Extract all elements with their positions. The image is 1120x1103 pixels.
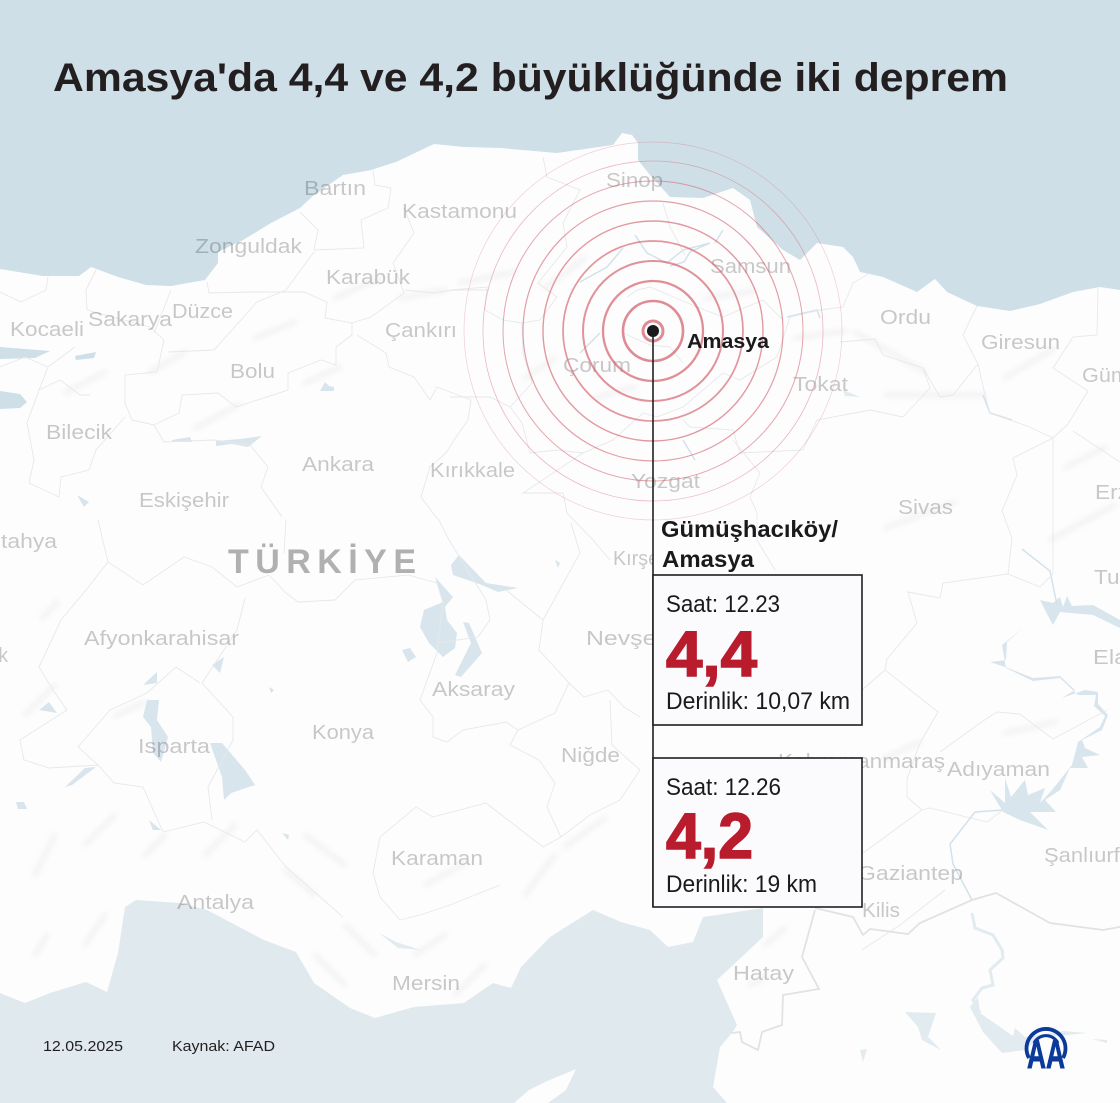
label: Kocaeli: Kocaeli (10, 319, 84, 341)
panel: second earthquake 12.26 (653, 758, 862, 907)
depth: Derinlik: 19 km (666, 871, 817, 898)
label: TÜRKİYE country name: TÜRKİYE (228, 543, 416, 581)
depth: Derinlik: 10,07 km (666, 688, 850, 715)
date: 12.05.2025 (43, 1038, 123, 1055)
epicentre seismic rings (464, 142, 842, 520)
label: Bartın: Bartın (304, 178, 366, 200)
label: Sakarya: Sakarya (88, 309, 173, 331)
label: Antalya: Antalya (177, 892, 255, 914)
label: Kırşehir: Kırşehir (613, 548, 681, 570)
lakes and dams (0, 347, 1120, 1062)
icon: Anadolu Agency logo: AA (1027, 1033, 1065, 1077)
label: Zonguldak: Zonguldak (195, 236, 303, 258)
label: Düzce: Düzce (172, 301, 233, 323)
label: Afyonkarahisar: Afyonkarahisar (84, 628, 239, 650)
label: Çorum: Çorum (563, 355, 631, 377)
Black Sea (0, 0, 1120, 311)
label: Mersin: Mersin (392, 973, 460, 995)
label: Eskişehir: Eskişehir (139, 490, 229, 512)
icon: Anadolu Agency logo (1026, 1029, 1066, 1077)
time: Saat: 12.23 (666, 591, 780, 618)
label: Isparta: Isparta (138, 736, 211, 758)
label: Niğde: Niğde (561, 745, 620, 767)
island: Cyprus (514, 1069, 576, 1103)
label: Çankırı: Çankırı (385, 320, 457, 342)
label: Yozgat: Yozgat (631, 471, 700, 493)
province borders (0, 157, 1120, 950)
location heading: Gümüşhacıköy/Amasya: Gümüşhacıköy/ (661, 516, 839, 542)
label: Samsun: Samsun (710, 256, 791, 278)
magnitude 4,2: 4,2 (666, 800, 753, 872)
label: Nevşehir: Nevşehir (586, 628, 684, 650)
epicentre dot (647, 325, 659, 337)
label: Giresun: Giresun (981, 332, 1060, 354)
label: Bolu: Bolu (230, 361, 275, 383)
label: Bilecik: Bilecik (46, 422, 113, 444)
label: Sivas: Sivas (898, 497, 953, 519)
leader line from epicentre to boxes (652, 331, 654, 907)
label: Gaziantep: Gaziantep (858, 863, 963, 885)
label: Karaman: Karaman (391, 848, 483, 870)
label: Aksaray: Aksaray (432, 679, 515, 701)
label: Tokat: Tokat (793, 374, 848, 396)
label: Kilis: Kilis (862, 900, 900, 922)
source: Kaynak: AFAD (172, 1038, 275, 1055)
label: Adıyaman: Adıyaman (947, 759, 1050, 781)
label: Sinop: Sinop (606, 170, 663, 192)
label: Kastamonu: Kastamonu (402, 201, 517, 223)
hillshade relief (25, 258, 1115, 995)
Mediterranean Sea (0, 900, 763, 1103)
label: Hatay: Hatay (733, 963, 794, 985)
label: Karabük: Karabük (326, 267, 411, 289)
panel: first earthquake 12.23 (653, 575, 862, 725)
magnitude 4,4: 4,4 (666, 618, 757, 690)
label: Konya: Konya (312, 722, 375, 744)
location heading: Gümüşhacıköy/Amasya (661, 516, 839, 572)
location heading: Gümüşhacıköy/Amasya: Amasya (662, 546, 754, 572)
title: Amasya'da 4,4 ve 4,2 büyüklüğünde iki deprem (53, 56, 1008, 100)
label: Kırıkkale: Kırıkkale (430, 460, 515, 482)
Hatay and Syria border (732, 893, 1120, 1050)
label: Ankara: Ankara (302, 454, 375, 476)
province name labels (0, 170, 1120, 995)
time: Saat: 12.26 (666, 774, 781, 801)
label: Amasya: Amasya (687, 331, 770, 353)
label: Ordu: Ordu (880, 307, 931, 329)
rivers (580, 230, 1057, 1013)
label: Kahramanmaraş: Kahramanmaraş (778, 751, 945, 773)
